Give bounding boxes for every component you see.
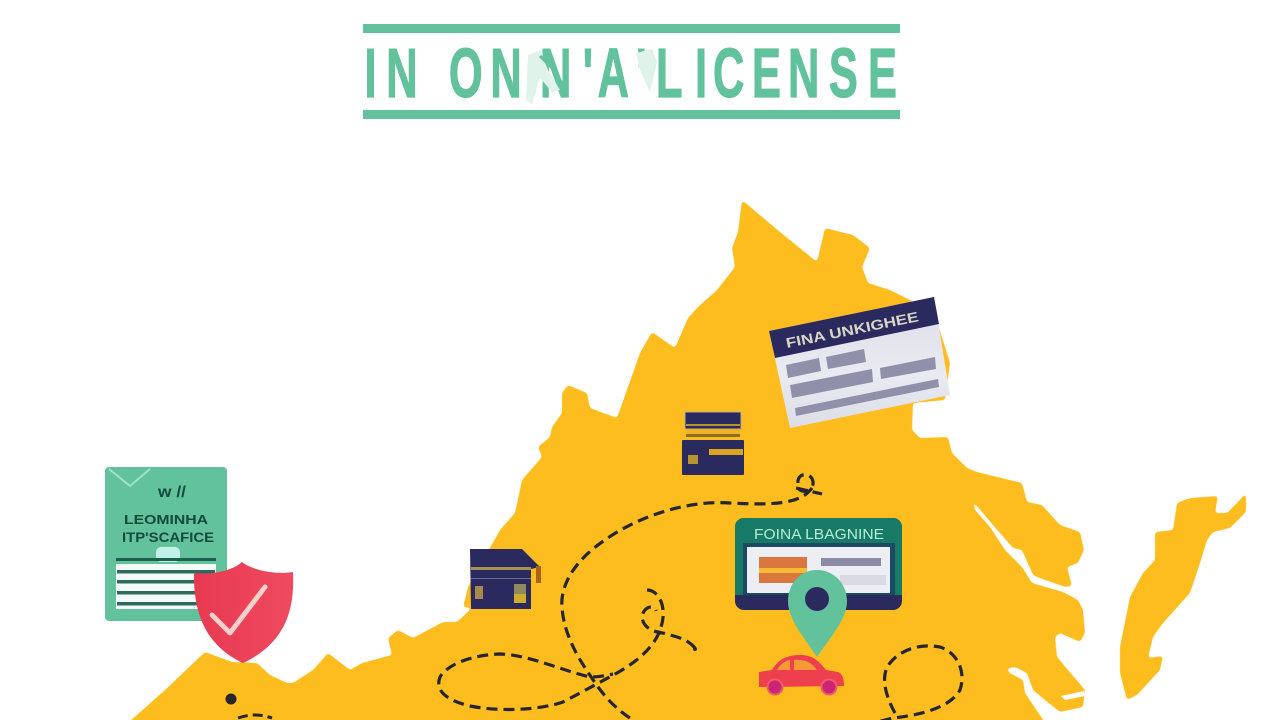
insurance document — [105, 467, 227, 621]
small white notch — [1061, 691, 1085, 700]
document heading line one: LEOMINHA — [124, 512, 209, 527]
title smudges — [526, 49, 657, 104]
envelope fold — [109, 469, 150, 486]
card detail bars — [786, 349, 939, 416]
dot at end of loop — [693, 647, 697, 651]
icon: red car — [759, 655, 844, 696]
map: Eastern Shore peninsula — [1120, 493, 1246, 700]
icon: shield with check — [194, 562, 293, 663]
dashed route: main path — [562, 475, 822, 720]
card header text: FINA UNKIGHEE — [784, 308, 920, 351]
title banner — [363, 24, 900, 119]
icon: graduation building — [470, 549, 541, 609]
license card: top right — [769, 297, 950, 428]
document marks: w // — [157, 484, 187, 501]
dashed route: lower-left start — [226, 694, 272, 718]
icon: map pin — [788, 570, 847, 657]
dashed route: right loop — [877, 646, 962, 720]
title text: IN ON N'A'LICENSE — [365, 34, 897, 113]
icon: wallet and cards — [682, 412, 744, 475]
map: Virginia mainland — [120, 200, 1085, 720]
document heading line two: ITP'SCAFICE — [122, 529, 214, 545]
card header band — [769, 297, 939, 358]
panel heading: FOINA LBAGNINE — [754, 526, 884, 543]
dashed route: loop path — [439, 590, 695, 709]
license screen panel — [735, 518, 902, 610]
